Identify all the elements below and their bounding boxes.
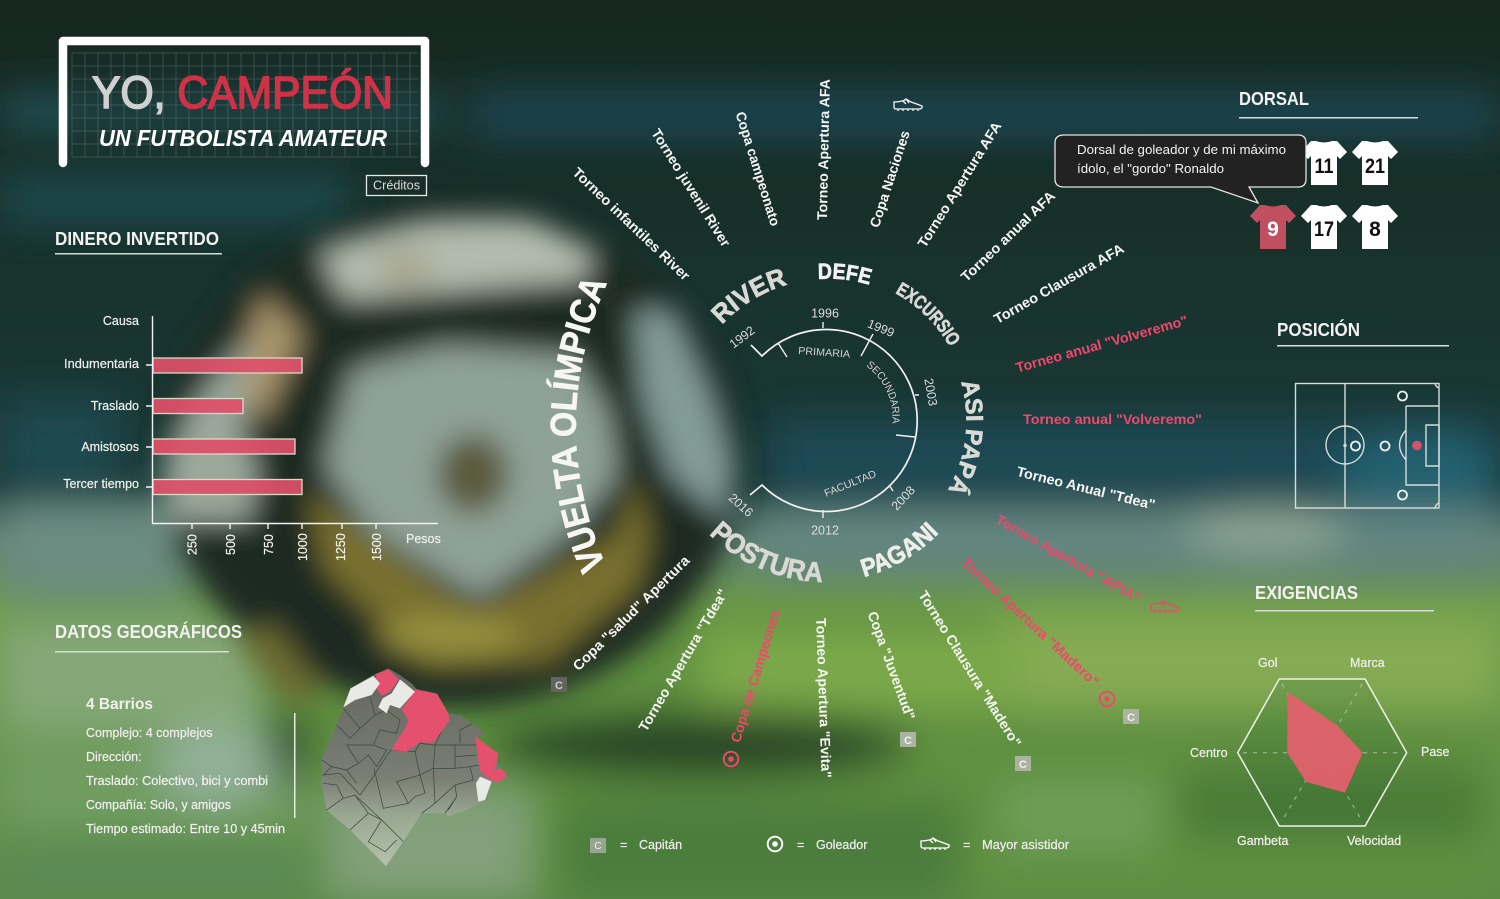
legend: capitán: =: [620, 838, 627, 852]
tournament labels: Torneo anual "Volveremo": [1023, 411, 1202, 427]
radar values: [1287, 692, 1363, 793]
axis labels: [1190, 656, 1450, 848]
stage labels: FACULTAD: [823, 468, 879, 500]
radar chart: exigencias: [1190, 656, 1450, 848]
tournament labels: Torneo Anual "Tdea": [1015, 463, 1157, 513]
title: goal frame with net: [63, 41, 425, 163]
stage labels: SECUNDARIA: [867, 362, 900, 424]
club names: PAGANI: [860, 521, 938, 578]
legend: capitán: Capitán: [639, 838, 682, 852]
value labels: [186, 532, 441, 561]
text block: datos geográficos: [86, 696, 296, 836]
white barrios: [343, 676, 492, 802]
axis labels: Velocidad: [1347, 834, 1401, 848]
text block: datos geográficos: 4 Barrios: [86, 696, 153, 713]
tournament labels: Torneo anual "Volveremo": [1014, 312, 1189, 376]
club names: DEFE: [818, 263, 872, 285]
callout: goal scorer jersey: [1055, 135, 1306, 203]
year labels: 2016: [726, 491, 756, 520]
axis labels: Gambeta: [1237, 834, 1288, 848]
credits button: [366, 176, 426, 196]
text block: datos geográficos: Compañía: Solo, y amigos: [86, 798, 231, 812]
legend: goleador: =: [797, 838, 804, 852]
timeline arc: [750, 330, 917, 512]
category labels: Traslado: [91, 399, 139, 413]
legend: mayor asistidor: [921, 838, 1069, 852]
jerseys: 9: [1267, 218, 1279, 241]
value labels: 250: [186, 534, 200, 555]
legend: goleador: [768, 837, 867, 852]
tournament labels: Copa de Campeones: [727, 607, 783, 744]
barrio boundaries: [322, 697, 480, 852]
bar chart: dinero invertido: [63, 314, 441, 561]
axis labels: Pase: [1421, 745, 1450, 759]
assist markers: [894, 99, 1179, 613]
callout: goal scorer jersey: ídolo, el "gordo" Ronaldo: [1077, 161, 1224, 176]
text block: datos geográficos: Tiempo estimado: Entre 10 y 45min: [86, 822, 285, 836]
legend: capitán: [590, 838, 682, 853]
tournament labels: Copa campeonato: [732, 110, 784, 228]
value labels: 500: [224, 534, 238, 555]
club names: VUELTA OLÍMPICA: [546, 282, 608, 576]
heading: dinero invertido: DINERO INVERTIDO: [55, 229, 219, 249]
stage labels: PRIMARIA: [798, 345, 851, 361]
text block: datos geográficos: Complejo: 4 complejos: [86, 726, 212, 740]
club names: POSTURA: [710, 520, 822, 582]
year labels: 1999: [865, 317, 896, 340]
club names: RIVER: [710, 269, 788, 324]
value labels: Pesos: [406, 532, 441, 546]
year labels: [726, 306, 940, 537]
value labels: 1500: [370, 533, 384, 561]
captain markers: C: [1127, 712, 1135, 724]
text block: datos geográficos: Traslado: Colectivo, bici y combi: [86, 774, 268, 788]
heading: dorsal: DORSAL: [1239, 89, 1309, 109]
tournament labels: Torneo Apertura "Evita": [813, 618, 835, 778]
jerseys: 21: [1365, 155, 1385, 178]
jerseys: 8: [1369, 218, 1381, 241]
stage labels: [798, 345, 900, 500]
tournament labels: Torneo Apertura AFA: [814, 79, 833, 220]
net grid: [72, 53, 418, 157]
tournament labels: Torneo Apertura "APIA": [993, 511, 1144, 606]
legend: capitán: C: [594, 841, 602, 852]
tournament labels: Torneo juvenil River: [648, 126, 734, 250]
category labels: [63, 314, 139, 491]
player positions: [1351, 392, 1407, 500]
category labels: Causa: [103, 314, 139, 328]
radial chart: timeline and clubs: [546, 79, 1202, 778]
year labels: 1992: [727, 323, 758, 351]
tournament labels: Copa "salud" Apertura: [569, 552, 693, 674]
tournament labels: Torneo infantiles River: [570, 164, 694, 284]
tournament labels: Torneo Clausura AFA: [991, 240, 1127, 327]
jerseys: [1250, 141, 1398, 249]
legend: goleador: Goleador: [816, 838, 867, 852]
highlighted barrios: [376, 669, 507, 783]
tournament labels: Copa "Juventud": [865, 609, 919, 722]
captain markers: C: [555, 680, 563, 692]
tournament labels: Torneo Clausura "Madero": [915, 588, 1025, 750]
tournament labels: Torneo Apertura "Tdea": [635, 586, 731, 734]
tournament labels: Torneo Apertura "Madero": [959, 554, 1103, 690]
jerseys: 17: [1314, 218, 1334, 241]
year labels: 2012: [811, 523, 839, 537]
tournament labels: Torneo anual AFA: [957, 187, 1058, 285]
credits button: Créditos: [373, 178, 420, 192]
text block: datos geográficos: Dirección:: [86, 750, 142, 764]
axis labels: Marca: [1350, 656, 1385, 670]
value labels: 1250: [334, 533, 348, 561]
heading: posición: POSICIÓN: [1277, 319, 1360, 340]
tournament labels: Copa Naciones: [866, 128, 913, 229]
category labels: Tercer tiempo: [63, 477, 139, 491]
value labels: 750: [262, 534, 276, 555]
callout: goal scorer jersey: Dorsal de goleador y de mi máximo: [1077, 142, 1286, 157]
value labels: 1000: [296, 533, 310, 561]
category labels: Amistosos: [81, 440, 139, 454]
year labels: 1996: [811, 306, 839, 320]
heading: datos geográficos: DATOS GEOGRÁFICOS: [55, 621, 242, 642]
tournament labels: Torneo Apertura AFA: [914, 119, 1005, 250]
club names: ASI PAPÁ: [948, 382, 984, 496]
axis labels: Gol: [1258, 656, 1277, 670]
club names: EXCURSIO: [896, 282, 960, 345]
heading: exigencias: EXIGENCIAS: [1255, 583, 1358, 603]
legend: mayor asistidor: Mayor asistidor: [982, 838, 1069, 852]
year labels: 2003: [921, 377, 940, 407]
map: Buenos Aires barrios: [322, 668, 507, 866]
subheading: UN FUTBOLISTA AMATEUR: [99, 125, 387, 151]
heading: Yo, Campeón: YO, CAMPEÓN: [92, 67, 393, 118]
goal posts: [63, 41, 425, 163]
jerseys: 11: [1314, 155, 1334, 178]
year labels: 2008: [889, 483, 918, 513]
bars: [153, 358, 302, 494]
axis labels: Centro: [1190, 746, 1228, 760]
scorer markers: [724, 692, 1114, 766]
captain markers: C: [904, 735, 912, 747]
captain markers: C: [1019, 759, 1027, 771]
legend: mayor asistidor: =: [963, 838, 970, 852]
legend: [590, 837, 1069, 853]
category labels: Indumentaria: [64, 357, 139, 371]
pitch position diagram: [1296, 384, 1439, 508]
club names: [546, 263, 984, 582]
tournament labels: [569, 79, 1202, 778]
captain markers: [551, 677, 1139, 771]
